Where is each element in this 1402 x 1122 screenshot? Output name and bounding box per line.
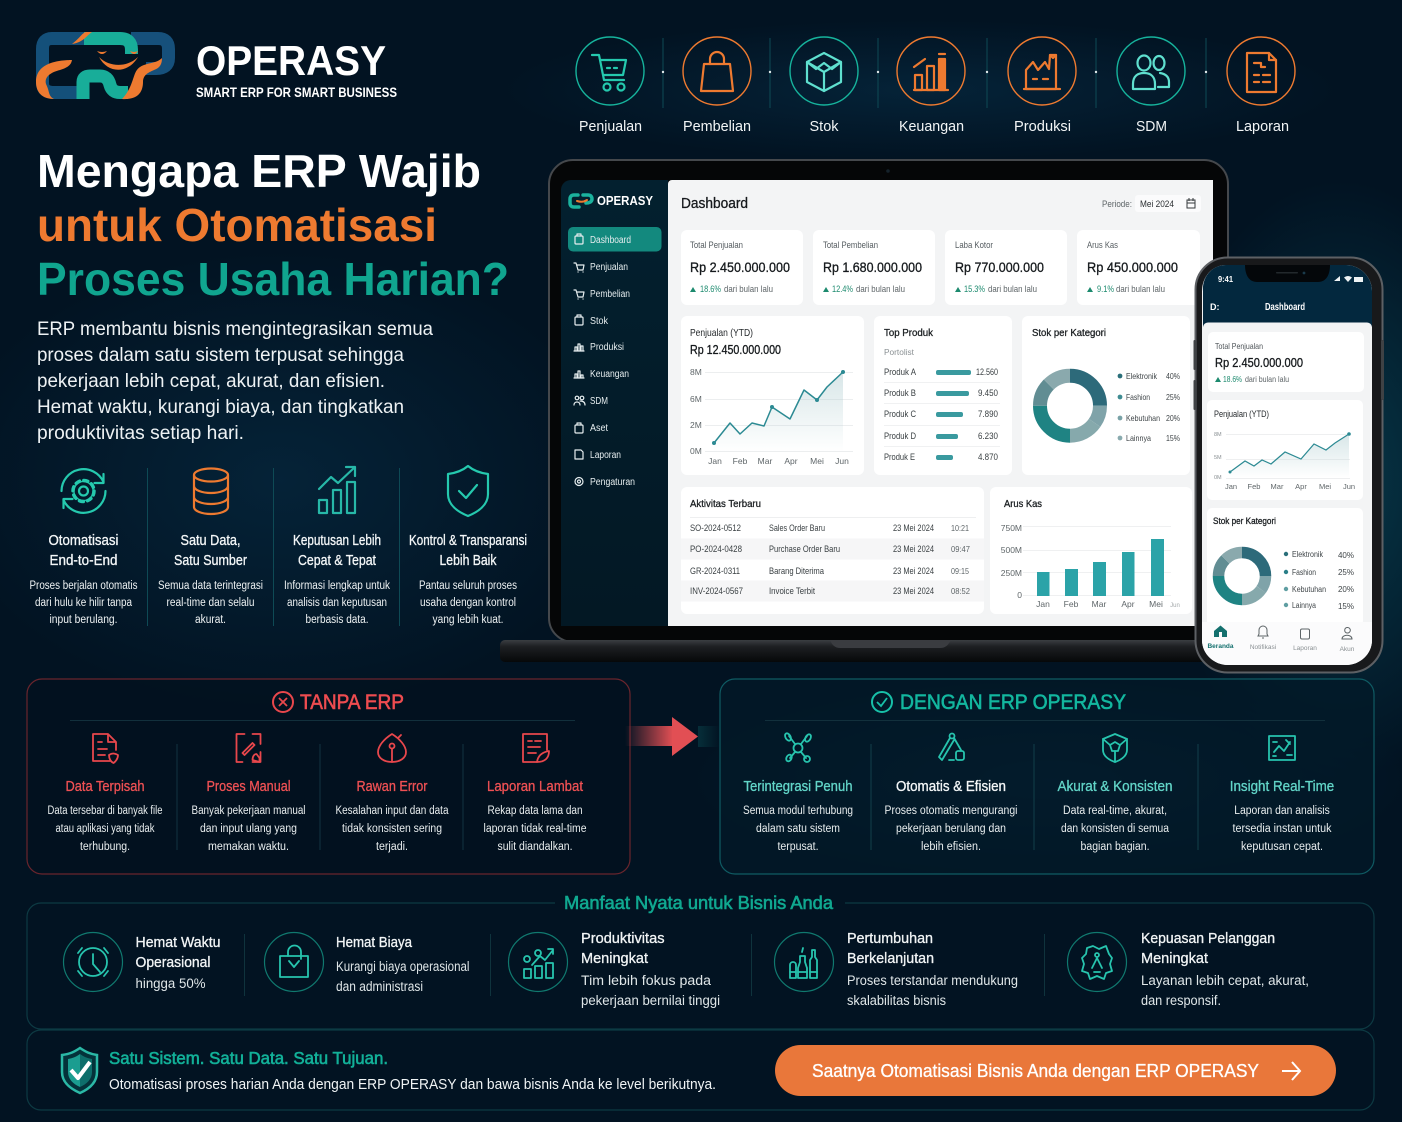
feature: Otomatisasi End-to-End: End-to-End xyxy=(50,553,118,569)
phone line chart: 8M xyxy=(1214,432,1222,438)
item: Otomatis & Efisien: pekerjaan berulang dan xyxy=(896,823,1006,835)
line chart: Penjualan YTD: Mei xyxy=(810,456,824,466)
item: Terintegrasi Penuh: Terintegrasi Penuh xyxy=(744,779,852,795)
bar chart: Arus Kas: Apr xyxy=(1121,599,1135,609)
bar list: Top Produk: Top Produk xyxy=(884,327,934,339)
logo mark xyxy=(36,32,168,99)
item: Data Terpisah: Data tersebar di banyak file xyxy=(48,805,162,817)
laptop body xyxy=(500,160,1228,662)
item: Akurat & Konsisten: Data real-time, akurat, xyxy=(1063,805,1167,817)
bar list: Top Produk: Produk B xyxy=(884,388,916,399)
menu labels: Aset xyxy=(590,423,608,434)
bar chart: Arus Kas: 750M xyxy=(1001,523,1022,533)
line chart: Penjualan YTD: Apr xyxy=(784,456,798,466)
period selector xyxy=(1102,195,1201,212)
phone donut chart: 20% xyxy=(1338,585,1354,594)
feature: Keputusan Lebih Cepat & Tepat: Cepat & Tepat xyxy=(298,553,376,569)
item: Terintegrasi Penuh: dalam satu sistem xyxy=(756,823,840,835)
feature: Satu Data, Satu Sumber: akurat. xyxy=(195,614,226,626)
intro paragraph: produktivitas setiap hari. xyxy=(37,423,244,444)
item: Akurat & Konsisten: Akurat & Konsisten xyxy=(1058,779,1172,795)
phone header: Dashboard xyxy=(1265,301,1305,313)
bar chart: Arus Kas: Mei xyxy=(1149,599,1163,609)
phone header: D: xyxy=(1210,302,1220,312)
intro paragraph: Hemat waktu, kurangi biaya, dan tingkatkan xyxy=(37,397,404,418)
module: Laporan xyxy=(1227,37,1295,135)
item: Laporan Lambat: laporan tidak real-time xyxy=(484,823,586,835)
item: Proses Manual: Banyak pekerjaan manual xyxy=(192,805,306,817)
item: Proses Manual: memakan waktu. xyxy=(208,841,289,853)
line chart: Penjualan YTD: 8M xyxy=(690,367,702,377)
phone line chart: 5M xyxy=(1214,455,1222,461)
table: Aktivitas Terbaru: Invoice Terbit xyxy=(769,586,815,597)
item: Rawan Error xyxy=(336,734,449,853)
item: Insight Real-Time: tersedia instan untuk xyxy=(1232,823,1332,835)
feature: Satu Data, Satu Sumber: Satu Sumber xyxy=(174,553,247,569)
arrow: from TANPA to DENGAN xyxy=(625,717,720,756)
line chart: Penjualan YTD: 6M xyxy=(690,394,702,404)
bar list: Top Produk: Produk A xyxy=(884,367,917,378)
donut chart: Stok per Kategori: Kebutuhan xyxy=(1126,413,1160,423)
intro paragraph xyxy=(37,319,433,444)
benefit: Hemat Waktu: Operasional xyxy=(136,955,210,971)
main title xyxy=(37,145,509,305)
intro paragraph: pekerjaan lebih cepat, akurat, dan efisien. xyxy=(37,371,385,392)
KPI: Total Pembelian: dari bulan lalu xyxy=(856,284,905,295)
KPI: Arus Kas: Arus Kas xyxy=(1087,240,1118,251)
phone line chart: Apr xyxy=(1295,482,1307,491)
dashboard sidebar xyxy=(561,180,668,626)
line chart: Penjualan YTD: Feb xyxy=(733,456,748,466)
period selector: Mei 2024 xyxy=(1140,199,1174,209)
KPI: Arus Kas: 9.1% xyxy=(1097,284,1114,295)
KPI: Total Penjualan: Total Penjualan xyxy=(690,240,743,251)
table: Aktivitas Terbaru: 09:15 xyxy=(951,566,969,576)
main title: untuk Otomatisasi xyxy=(37,199,437,251)
benefit: Pertumbuhan Berkelanjutan: Pertumbuhan xyxy=(847,931,933,947)
benefit: Hemat Waktu: hingga 50% xyxy=(136,976,206,991)
table: Aktivitas Terbaru: Barang Diterima xyxy=(769,566,825,577)
benefit: Pertumbuhan Berkelanjutan: Proses terstandar mendukung xyxy=(847,973,1018,988)
benefit: Kepuasan Pelanggan: Meningkat xyxy=(1141,951,1208,967)
phone card: Total Penjualan: 18.6% xyxy=(1223,375,1242,384)
bar chart: Arus Kas: 0 xyxy=(1017,590,1022,600)
feature columns xyxy=(30,466,527,626)
feature: Satu Data, Satu Sumber xyxy=(158,468,263,626)
line chart: Penjualan YTD: Penjualan (YTD) xyxy=(690,327,753,339)
bar list: Top Produk: Produk E xyxy=(884,452,915,463)
table: Aktivitas Terbaru: GR-2024-0311 xyxy=(690,566,740,577)
table: Aktivitas Terbaru xyxy=(681,487,984,614)
KPI: Laba Kotor: Laba Kotor xyxy=(955,240,993,251)
benefit: Produktivitas Meningkat: Tim lebih fokus pada xyxy=(581,973,712,988)
logo: OPERASY xyxy=(36,32,397,100)
item: Akurat & Konsisten xyxy=(1058,734,1172,853)
phone header xyxy=(1203,265,1372,327)
KPI: Total Pembelian: Rp 1.680.000.000 xyxy=(823,259,922,275)
item: Laporan Lambat: Rekap data lama dan xyxy=(488,805,582,817)
module: Penjualan xyxy=(576,37,644,135)
line chart: Penjualan YTD xyxy=(681,316,864,475)
item: Laporan Lambat: sulit diandalkan. xyxy=(498,841,572,853)
table: Aktivitas Terbaru: SO-2024-0512 xyxy=(690,523,741,534)
line chart: Penjualan YTD: Jan xyxy=(708,456,722,466)
item: Terintegrasi Penuh: terpusat. xyxy=(778,841,818,853)
feature: Keputusan Lebih Cepat & Tepat: Keputusan Lebih xyxy=(293,533,381,549)
dashboard heading: Dashboard xyxy=(681,195,748,212)
donut chart: Stok per Kategori: Elektronik xyxy=(1126,371,1158,381)
period selector: Periode: xyxy=(1102,199,1132,210)
table: Aktivitas Terbaru: 09:47 xyxy=(951,544,970,554)
bar chart: Arus Kas xyxy=(990,487,1192,614)
item: Laporan Lambat xyxy=(484,734,586,853)
menu labels: Penjualan xyxy=(590,262,628,273)
bar chart: Arus Kas: 250M xyxy=(1001,568,1022,578)
bar list: Top Produk: 7.890 xyxy=(978,409,998,420)
phone bottom navigation: Beranda xyxy=(1207,643,1234,650)
phone donut chart: Fashion xyxy=(1292,568,1316,577)
dashboard main screen xyxy=(668,180,1213,626)
donut chart: Stok per Kategori: 40% xyxy=(1166,371,1180,381)
donut chart: Stok per Kategori: 20% xyxy=(1166,413,1180,423)
feature: Otomatisasi End-to-End: Proses berjalan otomatis xyxy=(30,580,138,592)
KPI: Total Pembelian: Total Pembelian xyxy=(823,240,878,251)
intro paragraph: proses dalam satu sistem terpusat sehingga xyxy=(37,345,404,366)
module: Produksi: Produksi xyxy=(1014,118,1071,135)
module: Stok: Stok xyxy=(810,118,839,135)
feature: Kontrol & Transparansi: Kontrol & Transparansi xyxy=(409,533,527,549)
bar list: Top Produk: 6.230 xyxy=(978,431,998,442)
intro paragraph: ERP membantu bisnis mengintegrasikan semua xyxy=(37,319,433,340)
item: Proses Manual: dan input ulang yang xyxy=(200,823,297,835)
phone donut chart: 40% xyxy=(1338,551,1354,560)
module: SDM: SDM xyxy=(1136,118,1167,135)
benefit: Kepuasan Pelanggan: dan responsif. xyxy=(1141,993,1221,1008)
feature: Kontrol & Transparansi xyxy=(409,466,527,626)
module: Pembelian xyxy=(683,37,751,135)
phone line chart xyxy=(1207,400,1363,500)
benefit: Produktivitas Meningkat: Produktivitas xyxy=(581,931,664,947)
panel: DENGAN ERP OPERASY xyxy=(720,679,1374,874)
feature: Kontrol & Transparansi: usaha dengan kontrol xyxy=(420,597,516,609)
menu labels: Stok xyxy=(590,316,609,327)
benefit: Hemat Waktu xyxy=(64,932,220,992)
donut chart: Stok per Kategori xyxy=(1022,316,1190,475)
dashboard sidebar: OPERASY xyxy=(597,193,653,208)
KPI: Laba Kotor: 15.3% xyxy=(964,284,985,295)
table: Aktivitas Terbaru: 10:21 xyxy=(951,523,969,533)
table: Aktivitas Terbaru: INV-2024-0567 xyxy=(690,586,743,597)
module icon row xyxy=(576,37,1295,135)
phone donut chart: Stok per Kategori xyxy=(1213,516,1276,526)
table: Aktivitas Terbaru: 08:52 xyxy=(951,586,970,596)
phone line chart: Mar xyxy=(1271,482,1284,491)
phone donut chart xyxy=(1207,508,1363,626)
item: Rawan Error: Rawan Error xyxy=(356,779,428,795)
phone card: Total Penjualan: dari bulan lalu xyxy=(1245,375,1289,384)
menu labels: Dashboard xyxy=(590,235,631,246)
donut chart: Stok per Kategori: Stok per Kategori xyxy=(1032,327,1106,339)
item: Insight Real-Time: Laporan dan analisis xyxy=(1234,805,1330,817)
tagline: SMART ERP FOR SMART BUSINESS xyxy=(196,85,397,100)
KPI: Laba Kotor: Rp 770.000.000 xyxy=(955,259,1044,275)
icon: shield with check xyxy=(62,1048,97,1093)
benefit: Pertumbuhan Berkelanjutan: skalabilitas bisnis xyxy=(847,993,946,1008)
menu labels: Pengaturan xyxy=(590,477,635,488)
KPI: Total Pembelian xyxy=(813,230,935,305)
menu labels: SDM xyxy=(590,396,608,407)
module: Produksi xyxy=(1008,37,1076,135)
bar chart: Arus Kas: Arus Kas xyxy=(1004,498,1042,510)
phone card: Total Penjualan: Total Penjualan xyxy=(1215,341,1263,351)
icon: gear with cycle arrows xyxy=(62,469,106,513)
call-to-action button xyxy=(775,1045,1336,1096)
feature: Keputusan Lebih Cepat & Tepat: berbasis data. xyxy=(306,614,368,626)
slogan: Satu Sistem. Satu Data. Satu Tujuan. xyxy=(109,1048,388,1068)
phone bottom navigation: Notifikasi xyxy=(1250,644,1276,651)
phone donut chart: Kebutuhan xyxy=(1292,585,1326,594)
phone line chart: 0M xyxy=(1214,475,1222,481)
item: Insight Real-Time: Insight Real-Time xyxy=(1230,779,1334,795)
module: Pembelian: Pembelian xyxy=(683,118,751,135)
phone donut chart: Lainnya xyxy=(1292,601,1316,610)
benefit: Produktivitas Meningkat xyxy=(508,931,720,1008)
table: Aktivitas Terbaru: 23 Mei 2024 xyxy=(893,523,934,534)
feature: Satu Data, Satu Sumber: Semua data terintegrasi xyxy=(158,580,263,592)
phone bottom navigation: Akun xyxy=(1340,646,1355,653)
benefit: Produktivitas Meningkat: Meningkat xyxy=(581,951,648,967)
brand name: OPERASY xyxy=(196,37,386,84)
item: Proses Manual: Proses Manual xyxy=(206,779,290,795)
heading: DENGAN ERP OPERASY: DENGAN ERP OPERASY xyxy=(900,691,1126,714)
phone line chart: Mei xyxy=(1319,482,1331,491)
donut chart: Stok per Kategori: 15% xyxy=(1166,433,1180,443)
bar list: Top Produk: Produk D xyxy=(884,431,916,442)
bar chart: Arus Kas: Mar xyxy=(1092,599,1106,609)
icon: rising bar chart xyxy=(319,467,355,513)
donut chart: Stok per Kategori: 25% xyxy=(1166,392,1180,402)
item: Otomatis & Efisien: lebih efisien. xyxy=(921,841,981,853)
phone card: Total Penjualan: Rp 2.450.000.000 xyxy=(1215,356,1303,370)
table: Aktivitas Terbaru: 23 Mei 2024 xyxy=(893,566,934,577)
bar chart: Arus Kas: Feb xyxy=(1064,599,1079,609)
item: Laporan Lambat: Laporan Lambat xyxy=(487,779,583,795)
line chart: Penjualan YTD: Jun xyxy=(835,456,849,466)
phone header: 9:41 xyxy=(1218,274,1233,284)
icon: database xyxy=(194,468,228,514)
panel: closing banner xyxy=(27,1030,1374,1110)
KPI: Total Penjualan xyxy=(681,230,803,305)
item: Proses Manual xyxy=(192,734,306,853)
item: Rawan Error: tidak konsisten sering xyxy=(342,823,442,835)
KPI: Total Penjualan: 18.6% xyxy=(700,284,721,295)
menu icons xyxy=(574,234,585,486)
module: Penjualan: Penjualan xyxy=(579,118,642,135)
panel: Manfaat Nyata xyxy=(27,893,1374,1029)
item: Otomatis & Efisien: Proses otomatis mengurangi xyxy=(884,805,1018,817)
phone donut chart: 15% xyxy=(1338,602,1354,611)
item: Terintegrasi Penuh: Semua modul terhubung xyxy=(743,805,853,817)
line chart: Penjualan YTD: 0M xyxy=(690,446,702,456)
feature: Otomatisasi End-to-End: Otomatisasi xyxy=(48,533,118,549)
heading: TANPA ERP: TANPA ERP xyxy=(300,691,404,714)
menu labels xyxy=(590,235,635,488)
phone line chart: Penjualan (YTD) xyxy=(1214,409,1269,419)
KPI: Arus Kas: Rp 450.000.000 xyxy=(1087,259,1178,275)
benefit: Hemat Biaya: Kurangi biaya operasional xyxy=(336,959,470,974)
module: Stok xyxy=(790,37,858,135)
active menu item xyxy=(568,227,662,252)
call-to-action button: Saatnya Otomatisasi Bisnis Anda dengan ERP OPERASY xyxy=(812,1061,1259,1081)
benefit: Pertumbuhan Berkelanjutan: Berkelanjutan xyxy=(847,951,934,967)
phone line chart: Jun xyxy=(1343,482,1355,491)
phone bottom navigation: Laporan xyxy=(1293,645,1317,652)
feature: Keputusan Lebih Cepat & Tepat: analisis dan keputusan xyxy=(287,597,387,609)
item: Akurat & Konsisten: dan konsisten di semua xyxy=(1061,823,1170,835)
line chart: Penjualan YTD: Rp 12.450.000.000 xyxy=(690,343,781,357)
phone mockup xyxy=(1194,258,1384,672)
KPI: Laba Kotor: dari bulan lalu xyxy=(988,284,1037,295)
benefit: Hemat Waktu: Hemat Waktu xyxy=(136,935,220,951)
table: Aktivitas Terbaru: 23 Mei 2024 xyxy=(893,544,934,555)
feature: Satu Data, Satu Sumber: Satu Data, xyxy=(180,533,240,549)
line chart: Penjualan YTD: 2M xyxy=(690,420,702,430)
bar list: Top Produk: Portolist xyxy=(884,348,915,357)
item: Insight Real-Time: keputusan cepat. xyxy=(1241,841,1323,853)
benefit: Produktivitas Meningkat: pekerjaan bernilai tinggi xyxy=(581,993,720,1008)
feature: Satu Data, Satu Sumber: real-time dan selalu xyxy=(166,597,254,609)
KPI: Arus Kas: dari bulan lalu xyxy=(1116,284,1165,295)
feature: Keputusan Lebih Cepat & Tepat: Informasi lengkap untuk xyxy=(284,580,390,592)
benefit: Hemat Biaya xyxy=(264,932,470,994)
bar chart: Arus Kas: Jan xyxy=(1036,599,1050,609)
item: Data Terpisah: terhubung. xyxy=(80,841,130,853)
benefit: Kepuasan Pelanggan xyxy=(1068,931,1309,1008)
module: Keuangan xyxy=(897,37,965,135)
line chart: Penjualan YTD: Mar xyxy=(758,456,772,466)
module: Laporan: Laporan xyxy=(1236,118,1289,135)
feature: Kontrol & Transparansi: Pantau seluruh proses xyxy=(419,580,517,592)
item: Data Terpisah: atau aplikasi yang tidak xyxy=(56,823,155,835)
item: Rawan Error: Kesalahan input dan data xyxy=(336,805,449,817)
item: Otomatis & Efisien xyxy=(884,734,1018,853)
item: Akurat & Konsisten: bagian bagian. xyxy=(1080,841,1150,853)
table: Aktivitas Terbaru: 23 Mei 2024 xyxy=(893,586,934,597)
panel: TANPA ERP xyxy=(27,679,630,874)
KPI: Total Penjualan: Rp 2.450.000.000 xyxy=(690,259,790,275)
table: Aktivitas Terbaru: PO-2024-0428 xyxy=(690,544,742,555)
phone line chart: Feb xyxy=(1248,482,1260,491)
bar list: Top Produk: 9.450 xyxy=(978,388,998,399)
feature: Kontrol & Transparansi: Lebih Baik xyxy=(440,553,497,569)
bar list: Top Produk: 12.560 xyxy=(976,367,998,378)
bar list: Top Produk: Produk C xyxy=(884,409,916,420)
feature: Otomatisasi End-to-End: dari hulu ke hilir tanpa xyxy=(35,597,133,609)
main title: Mengapa ERP Wajib xyxy=(37,145,481,197)
feature: Otomatisasi End-to-End: input berulang. xyxy=(50,614,118,626)
item: Terintegrasi Penuh xyxy=(743,732,853,853)
bar list: Top Produk xyxy=(874,316,1012,475)
item: Otomatis & Efisien: Otomatis & Efisien xyxy=(896,779,1006,795)
phone card: Total Penjualan xyxy=(1208,332,1364,392)
bar chart: Arus Kas: 500M xyxy=(1001,545,1022,555)
menu labels: Pembelian xyxy=(590,289,630,300)
item: Data Terpisah xyxy=(48,734,162,853)
feature: Kontrol & Transparansi: yang lebih kuat. xyxy=(432,614,504,626)
laptop mockup xyxy=(500,160,1228,662)
module: Keuangan: Keuangan xyxy=(899,118,964,135)
KPI: Arus Kas xyxy=(1077,230,1200,305)
benefit: Kepuasan Pelanggan: Kepuasan Pelanggan xyxy=(1141,931,1275,947)
sidebar logo xyxy=(570,195,592,207)
benefit: Hemat Biaya: dan administrasi xyxy=(336,979,423,994)
icon: shield check xyxy=(448,466,488,516)
feature: Otomatisasi End-to-End xyxy=(30,469,138,626)
feature: Keputusan Lebih Cepat & Tepat xyxy=(284,467,390,626)
item: Data Terpisah: Data Terpisah xyxy=(66,779,144,795)
item: Rawan Error: terjadi. xyxy=(376,841,408,853)
KPI: Total Penjualan: dari bulan lalu xyxy=(724,284,773,295)
closing text: Otomatisasi proses harian Anda dengan ERP OPERASY dan bawa bisnis Anda ke level berikutnya. xyxy=(109,1077,716,1093)
donut chart: Stok per Kategori: Fashion xyxy=(1126,392,1150,402)
table: Aktivitas Terbaru: Aktivitas Terbaru xyxy=(690,498,761,510)
phone line chart: Jan xyxy=(1225,482,1237,491)
item: Insight Real-Time xyxy=(1230,736,1334,853)
table: Aktivitas Terbaru: Purchase Order Baru xyxy=(769,544,840,555)
phone donut chart: Elektronik xyxy=(1292,550,1324,559)
bar chart: Arus Kas: Jun xyxy=(1170,603,1180,609)
module: SDM xyxy=(1117,37,1185,135)
bar list: Top Produk: 4.870 xyxy=(978,452,998,463)
table: Aktivitas Terbaru: Sales Order Baru xyxy=(769,523,825,534)
benefit: Hemat Biaya: Hemat Biaya xyxy=(336,935,413,951)
KPI: Total Pembelian: 12.4% xyxy=(832,284,853,295)
donut chart: Stok per Kategori: Lainnya xyxy=(1126,433,1151,443)
menu labels: Produksi xyxy=(590,342,624,353)
menu labels: Keuangan xyxy=(590,369,629,380)
menu labels: Laporan xyxy=(590,450,621,461)
phone bottom navigation xyxy=(1202,622,1372,665)
benefit: Pertumbuhan Berkelanjutan xyxy=(774,931,1018,1008)
benefit: Kepuasan Pelanggan: Layanan lebih cepat, akurat, xyxy=(1141,973,1309,988)
phone donut chart: 25% xyxy=(1338,568,1354,577)
KPI: Laba Kotor xyxy=(945,230,1067,305)
main title: Proses Usaha Harian? xyxy=(37,253,509,305)
phone body xyxy=(1194,258,1384,672)
heading: Manfaat Nyata untuk Bisnis Anda: Manfaat Nyata untuk Bisnis Anda xyxy=(564,893,834,913)
